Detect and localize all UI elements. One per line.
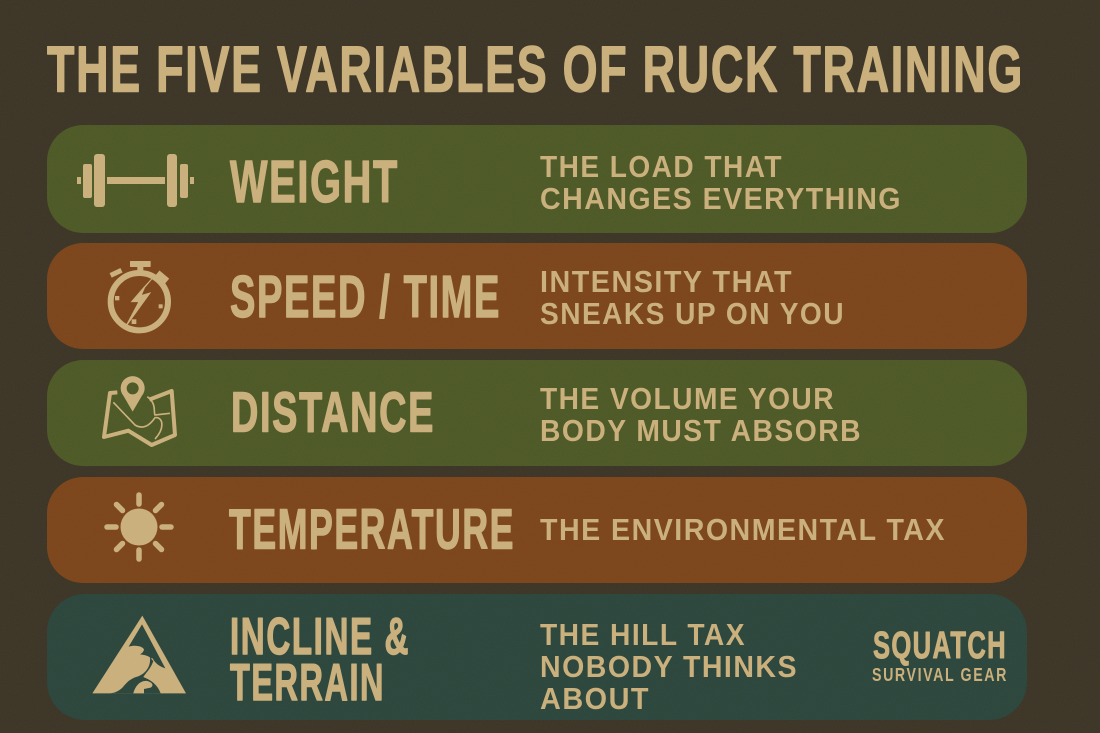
icon: stopwatch — [110, 261, 169, 330]
heading: incline and terrain: TERRAIN — [230, 654, 385, 712]
description: speed / time: SNEAKS UP ON YOU — [540, 296, 845, 331]
description: incline and terrain — [540, 617, 798, 716]
description: distance — [540, 381, 862, 448]
description: weight: THE LOAD THAT — [540, 149, 783, 184]
description: incline and terrain: NOBODY THINKS — [540, 649, 798, 684]
panel: weight — [47, 125, 1027, 233]
logo: squatch survival gear: SURVIVAL GEAR — [872, 665, 1008, 685]
heading: temperature: TEMPERATURE — [229, 498, 515, 562]
panel: temperature — [47, 477, 1027, 583]
description: incline and terrain: THE HILL TAX — [540, 617, 746, 652]
icon: mountain — [92, 616, 186, 693]
description: weight — [540, 149, 902, 216]
description: distance: BODY MUST ABSORB — [540, 413, 862, 448]
description: incline and terrain: ABOUT — [540, 681, 650, 716]
description: speed / time: INTENSITY THAT — [540, 264, 793, 299]
description: weight: CHANGES EVERYTHING — [540, 181, 902, 216]
icon: sun — [107, 495, 171, 559]
description: speed / time — [540, 264, 845, 331]
heading: incline and terrain: INCLINE & — [230, 608, 410, 666]
heading: distance: DISTANCE — [231, 380, 435, 444]
heading: incline and terrain — [230, 608, 410, 712]
logo: squatch survival gear — [872, 625, 1008, 685]
logo: squatch survival gear: SQUATCH — [873, 625, 1007, 667]
heading: weight: WEIGHT — [230, 149, 399, 215]
panel: incline and terrain — [47, 594, 1027, 720]
heading: speed / time: SPEED / TIME — [230, 264, 501, 330]
panel: distance — [47, 360, 1027, 466]
icon: map with pin — [104, 376, 175, 445]
description: distance: THE VOLUME YOUR — [540, 381, 835, 416]
panel: speed / time — [47, 243, 1027, 349]
icon: barbell — [77, 154, 194, 207]
description: temperature: THE ENVIRONMENTAL TAX — [540, 512, 946, 547]
